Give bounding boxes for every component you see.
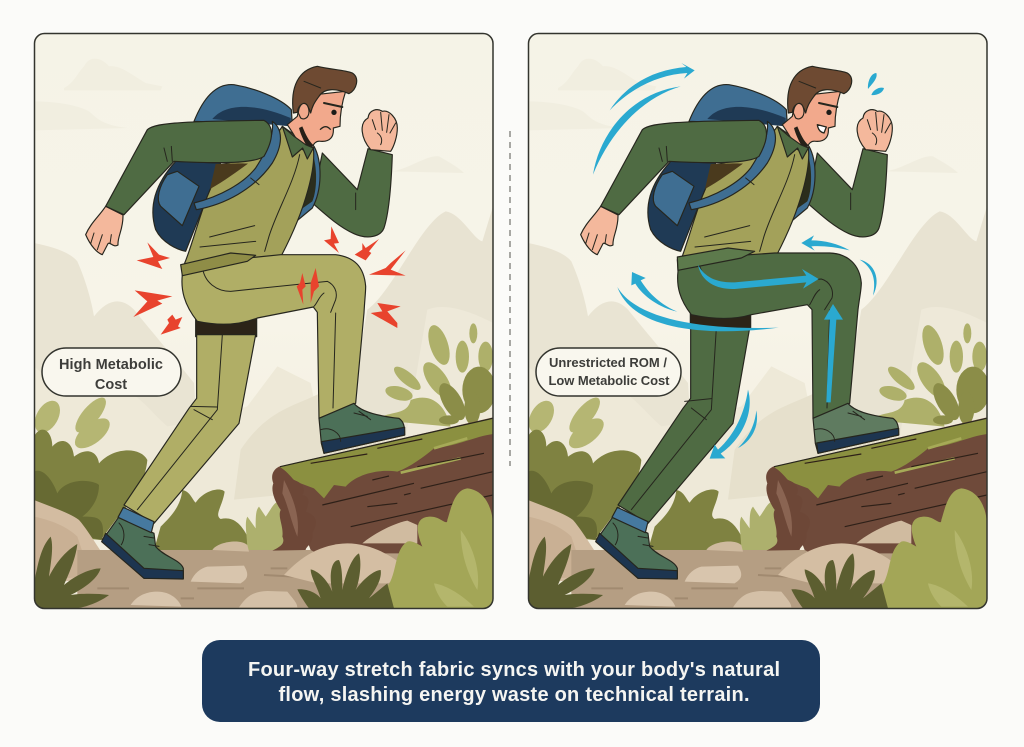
callout: high metabolic cost: Cost — [95, 377, 127, 393]
caption banner: flow, slashing energy waste on technical terrain. — [278, 684, 750, 706]
callout: high metabolic cost — [42, 348, 181, 396]
illustration: hiker with stretch pants — [523, 33, 991, 608]
caption banner: Four-way stretch fabric syncs with your body's natural — [248, 659, 780, 681]
panel frame — [34, 34, 493, 608]
hiker mouth: frown — [320, 127, 331, 130]
hiker upper body — [581, 66, 892, 265]
callout: unrestricted ROM — [536, 348, 681, 396]
sweat drops — [868, 73, 884, 95]
hiker mouth: gritted teeth — [817, 125, 826, 133]
background scene — [523, 33, 991, 608]
flow arrows — [593, 63, 877, 459]
hiker legs and boots — [102, 253, 405, 579]
panel frame — [528, 34, 987, 608]
divider between panels — [509, 131, 511, 466]
pain bolts — [133, 226, 406, 335]
illustration: hiker with stiff pants — [29, 33, 497, 608]
callout: high metabolic cost: High Metabolic — [59, 357, 163, 373]
panel: high metabolic cost — [29, 33, 497, 608]
background scene — [29, 33, 497, 608]
callout: unrestricted ROM: Unrestricted ROM / — [549, 355, 667, 370]
panel: low metabolic cost — [523, 33, 991, 608]
hiker upper body — [86, 66, 397, 265]
caption banner — [202, 640, 820, 722]
callout: unrestricted ROM: Low Metabolic Cost — [548, 373, 670, 388]
hiker legs and boots — [596, 248, 899, 579]
